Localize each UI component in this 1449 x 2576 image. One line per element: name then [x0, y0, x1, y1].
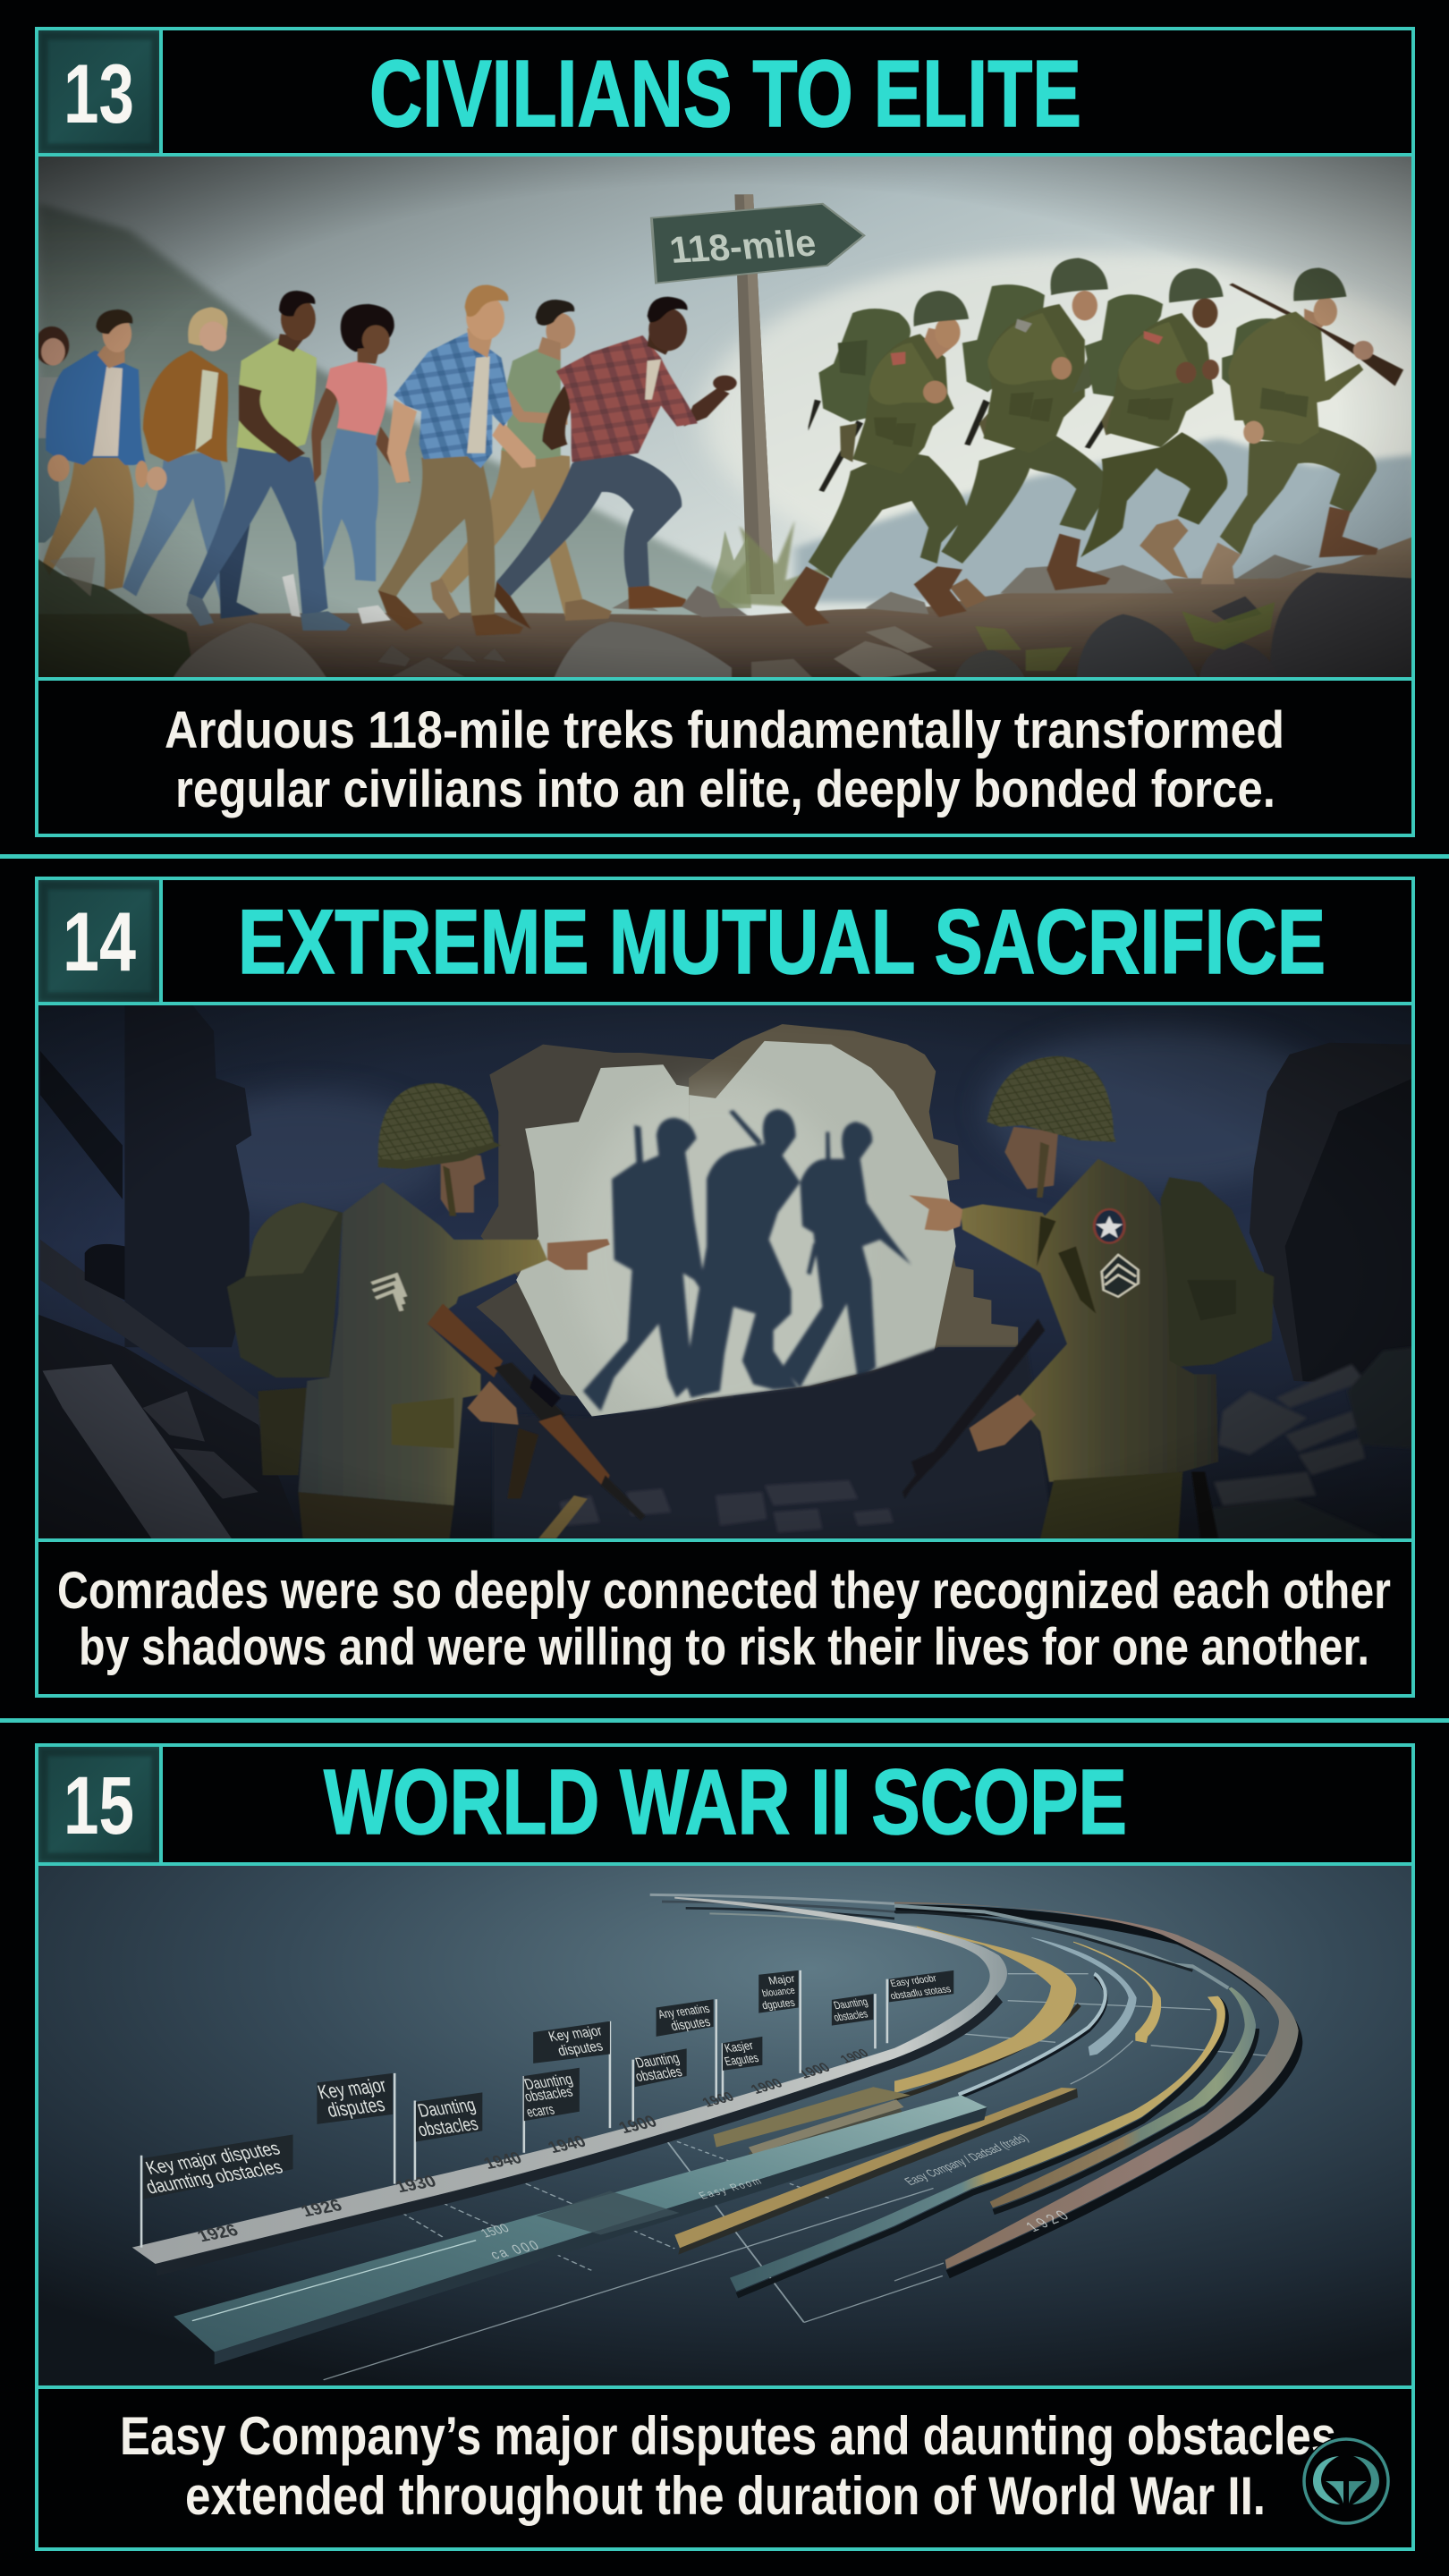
number badge 15: 15	[64, 1760, 134, 1852]
thick gold arc	[894, 2004, 1080, 2098]
callout flags with poles: obstacles	[522, 2084, 575, 2106]
logo emblem	[1301, 2436, 1391, 2526]
right half: wall and ruins	[689, 1024, 1413, 1398]
scene: curved perspective timeline	[37, 1864, 1419, 2387]
callout flags with poles: dgputes	[760, 1996, 796, 2012]
faint band inscriptions: Easy Company / Dadsad (trads)	[902, 2131, 1031, 2188]
civilians in casual clothes	[34, 284, 751, 680]
dirt ground	[34, 537, 1413, 680]
main light timeline band	[132, 1897, 1007, 2275]
olive and brown arc	[994, 2029, 1257, 2212]
panel frame with dividers	[37, 1745, 1413, 2549]
far tails of arcs	[650, 1894, 917, 1927]
straight gold bar	[678, 2089, 1078, 2255]
scene: two soldiers pointing at shadows on a ruined wall	[36, 1004, 1413, 1540]
callout flags with poles: obstadlu stotass	[889, 1984, 953, 2002]
callout flags with poles: obstacles	[415, 2114, 481, 2140]
short gold arc	[1073, 1942, 1161, 2043]
man in green tee	[186, 291, 351, 631]
callout flags with poles: Key major disputes	[143, 2139, 284, 2179]
caption 13: regular civilians into an elite, deeply bonded force.	[175, 760, 1275, 818]
callout flags with poles: ecarrs	[524, 2102, 556, 2121]
wall light	[572, 1082, 859, 1422]
blonde woman in brown jacket	[123, 307, 236, 602]
thin blue arc	[959, 1977, 1106, 2097]
shadow silhouettes on wall	[583, 1109, 911, 1411]
soldiers with helmets and backpacks	[751, 258, 1413, 680]
callout flags with poles: Daunting	[415, 2095, 479, 2122]
callout flags with poles: Kasjer	[723, 2038, 756, 2055]
scene: civilians marching past 118-mile sign and becoming soldiers	[34, 156, 1449, 682]
faint band inscriptions: Easy Room	[697, 2176, 764, 2201]
year labels on timeline: 1926	[194, 2221, 242, 2246]
long teal-to-gold arc	[737, 2000, 1226, 2295]
soldier 3	[1080, 268, 1227, 579]
callout flags with poles: daumting obstacles	[143, 2157, 286, 2198]
callout flags with poles: disputes	[669, 2015, 712, 2034]
year labels on timeline: 1900	[748, 2076, 786, 2097]
panel frame with dividers	[37, 29, 1413, 835]
year labels on timeline: 1900	[837, 2046, 872, 2066]
panel 15: world war ii scope	[37, 1745, 1419, 2549]
number badge 14	[38, 878, 161, 1004]
signpost with 118-mile arrow: 118-mile	[667, 222, 818, 271]
short bars and teal glass bar	[174, 2087, 987, 2365]
faint band inscriptions: 1920	[1021, 2207, 1072, 2235]
callout flags with poles	[141, 1970, 953, 2248]
soldier 1	[781, 291, 969, 626]
number badge 15	[38, 1745, 161, 1864]
rocky foreground right	[751, 572, 1413, 680]
thin guide lines	[324, 2139, 943, 2380]
caption 13: Arduous 118-mile treks fundamentally transformed	[165, 701, 1284, 759]
callout flags with poles: obstacles	[832, 2007, 869, 2024]
outer mauve arc	[895, 1909, 1298, 2275]
faint band inscriptions	[478, 2131, 1072, 2263]
callout flags with poles: Key major	[547, 2022, 605, 2045]
caption 15	[120, 2406, 1336, 2526]
year labels on timeline: 1940	[480, 2149, 525, 2174]
year labels on timeline: 1900	[699, 2089, 738, 2110]
year labels on timeline: 1926	[298, 2196, 345, 2221]
man in blue shirt	[43, 309, 148, 590]
faint band inscriptions: ca 000	[487, 2238, 542, 2263]
caption 13	[165, 701, 1284, 818]
callout flags with poles: Any renatins	[657, 2002, 712, 2021]
callout flags with poles: Eagutes	[723, 2051, 760, 2068]
man in red plaid striding	[495, 297, 737, 629]
panel frame with dividers	[37, 878, 1413, 1696]
callout flags with poles: Easy rdoobr	[889, 1973, 938, 1989]
blond man in blue plaid	[378, 284, 536, 636]
year labels on timeline: 1900	[795, 2061, 834, 2081]
number badge 14: 14	[63, 894, 136, 988]
callout flags with poles: obstacles	[633, 2063, 684, 2085]
panel 14: extreme mutual sacrifice	[36, 878, 1413, 1696]
callout flags with poles: Daunting	[633, 2050, 682, 2072]
left soldier pointing	[227, 1083, 645, 1538]
year labels on timeline: 1900	[615, 2113, 661, 2138]
year labels on timeline: 1940	[545, 2132, 589, 2157]
callout flags with poles: Key major	[315, 2074, 389, 2104]
callout flags with poles: blouance	[761, 1986, 796, 1999]
right soldier pointing	[902, 1056, 1274, 1538]
teal divider 2	[0, 1718, 1449, 1723]
far left woman	[34, 326, 69, 543]
callout flags with poles: Major	[767, 1972, 796, 1987]
grass and rocks left	[36, 530, 751, 680]
title: civilians to elite: CIVILIANS TO ELITE	[369, 41, 1081, 147]
left half: ruins and wall	[36, 1004, 733, 1538]
year labels on timeline: 1930	[393, 2172, 440, 2197]
woman in pink top	[283, 304, 410, 623]
callout flags with poles: Daunting	[832, 1996, 869, 2012]
faint band inscriptions: 1500	[478, 2221, 512, 2240]
rubble floor	[493, 1347, 1413, 1538]
curved timeline arcs	[650, 1894, 1299, 2295]
callout flags with poles: disputes	[324, 2093, 387, 2122]
panel 13: civilians to elite	[34, 29, 1449, 835]
soldier 4 with rifle	[1201, 267, 1403, 584]
callout flags with poles: Daunting	[521, 2070, 575, 2093]
callout flags with poles: disputes	[555, 2038, 605, 2059]
number badge 13	[38, 29, 161, 155]
man in green tee behind	[430, 300, 612, 621]
number badge 13: 13	[64, 47, 134, 140]
teal divider 1	[0, 854, 1449, 859]
soldier 2	[914, 258, 1113, 617]
signpost with 118-mile arrow	[651, 194, 864, 594]
short blue arc	[1031, 1937, 1137, 2055]
caption 15: extended throughout the duration of World War II.	[185, 2466, 1266, 2526]
caption 14	[57, 1562, 1391, 1676]
title: world war ii scope: WORLD WAR II SCOPE	[324, 1750, 1127, 1853]
year labels on timeline	[194, 2046, 872, 2246]
